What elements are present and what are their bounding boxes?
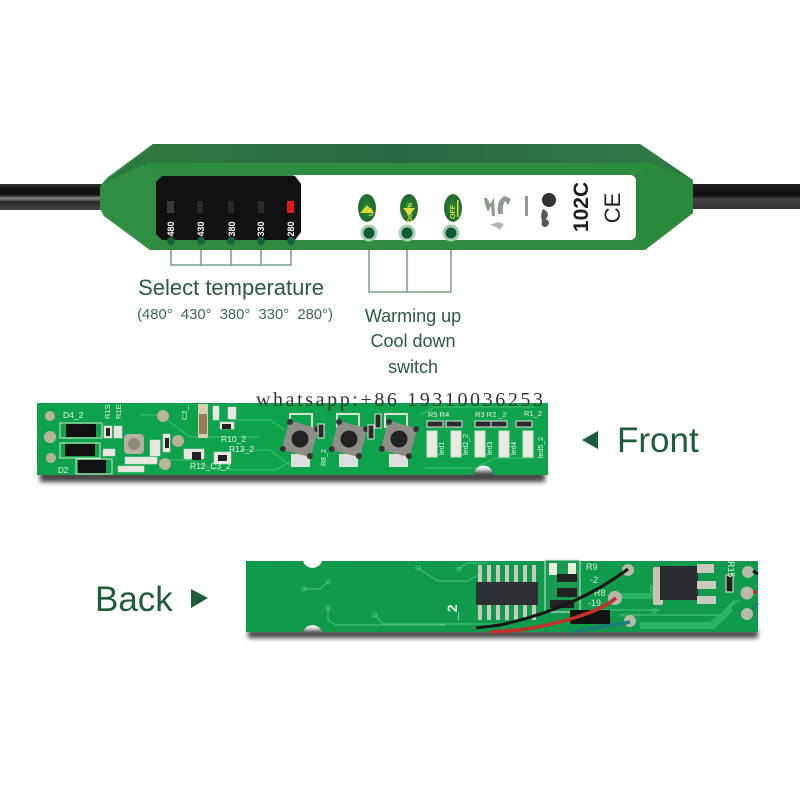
silkscreen labels: -2 (590, 575, 598, 585)
black diodes (60, 423, 112, 474)
silkscreen labels: R10_2 (221, 434, 246, 444)
silkscreen labels: R9 (586, 562, 598, 572)
back label: Back (95, 580, 173, 619)
heading: select temperature: Select temperature (138, 275, 324, 300)
temperature labels: 430 (196, 221, 206, 237)
traces (140, 407, 535, 470)
lighter copper pours (618, 585, 732, 629)
resistor row (318, 414, 532, 439)
temperature labels: 480 (166, 221, 176, 237)
right cable (690, 184, 800, 209)
silkscreen labels: D2 (58, 466, 69, 475)
temperature labels: 380 (227, 221, 237, 237)
silkscreen labels: R1E (114, 404, 123, 419)
silkscreen labels: led2_2 (463, 434, 470, 455)
tactile switch: right (378, 418, 420, 460)
silkscreen labels: R1S (103, 404, 112, 419)
silkscreen labels: R8_2 (321, 449, 328, 466)
silkscreen labels: led4 (511, 442, 518, 455)
switch bracket lines (369, 233, 451, 292)
temperature list: (480° 430° 380° 330° 280°) (137, 307, 333, 323)
button pads (290, 414, 407, 466)
model number: 102C (570, 182, 593, 232)
silkscreen labels: R1_2 (524, 409, 542, 418)
switch caption (365, 306, 461, 377)
switch caption: Cool down (370, 331, 456, 351)
wire stubs on the right (753, 571, 758, 574)
mounting pads (44, 410, 184, 470)
button icons: OFF (450, 204, 457, 219)
black LED display (156, 176, 301, 240)
green housing (100, 144, 693, 250)
temperature labels (166, 221, 296, 237)
switch caption: switch (388, 357, 438, 377)
capacitor C2 (198, 404, 208, 438)
temperature bracket lines (171, 241, 291, 265)
silkscreen labels: R13_2 (229, 444, 254, 454)
black wire (476, 569, 628, 628)
silkscreen labels: R5 R4 (428, 410, 449, 419)
logo smudge (484, 193, 556, 230)
dark chip parts (106, 424, 231, 461)
board shadow (248, 630, 758, 638)
front label: Front (617, 421, 699, 460)
switch caption: Warming up (365, 306, 461, 326)
traces (302, 563, 740, 625)
temperature labels: 330 (256, 221, 266, 237)
LED footprints (427, 431, 533, 457)
front PCB (37, 403, 548, 482)
R15 label: R15 (726, 561, 736, 578)
silkscreen labels: D4_2 (63, 410, 84, 420)
left cable (0, 184, 104, 210)
silkscreen labels: -19 (588, 598, 601, 608)
red wire (490, 598, 616, 632)
board shadow (40, 471, 545, 482)
TO-252 regulator (653, 564, 716, 605)
button icons: DOWN (408, 203, 414, 222)
back arrow (191, 589, 208, 608)
silkscreen labels: R12_C3_2 (190, 461, 231, 471)
back PCB (246, 560, 758, 638)
button icons (358, 194, 462, 222)
silkscreen labels: C2_ (180, 405, 189, 420)
CE mark: CE (600, 193, 625, 223)
SOIC chip (476, 565, 538, 620)
silkscreen labels (586, 562, 606, 608)
LED contact dots (167, 237, 295, 245)
silkscreen labels: led1 (439, 442, 446, 455)
silkscreen labels: R3 R2 _2 (475, 410, 507, 419)
white label panel (290, 175, 636, 240)
LED indicators (167, 201, 294, 213)
silkscreen labels: led5_2 (538, 437, 545, 458)
tactile switch: left (279, 418, 321, 460)
SMD resistor group (545, 560, 610, 624)
silkscreen labels: R8 (594, 588, 606, 598)
R15 resistor (726, 575, 733, 592)
button contact dots (360, 224, 460, 242)
solder pads (608, 564, 754, 627)
teal wire (572, 622, 630, 632)
board (246, 561, 758, 632)
silkscreen labels: led3 (487, 442, 494, 455)
small SMD parts (103, 406, 236, 472)
device controller body (100, 144, 693, 250)
tactile switch: middle (328, 418, 370, 460)
button icons: UP (369, 208, 375, 216)
temperature labels: 280 (286, 221, 296, 237)
silkscreen labels (58, 404, 545, 475)
potentiometer (124, 434, 144, 454)
front arrow (582, 431, 598, 449)
board (37, 403, 548, 475)
silkscreen mark: _2 (444, 604, 460, 621)
watermark: whatsapp:+86 19310036253 (256, 389, 543, 411)
